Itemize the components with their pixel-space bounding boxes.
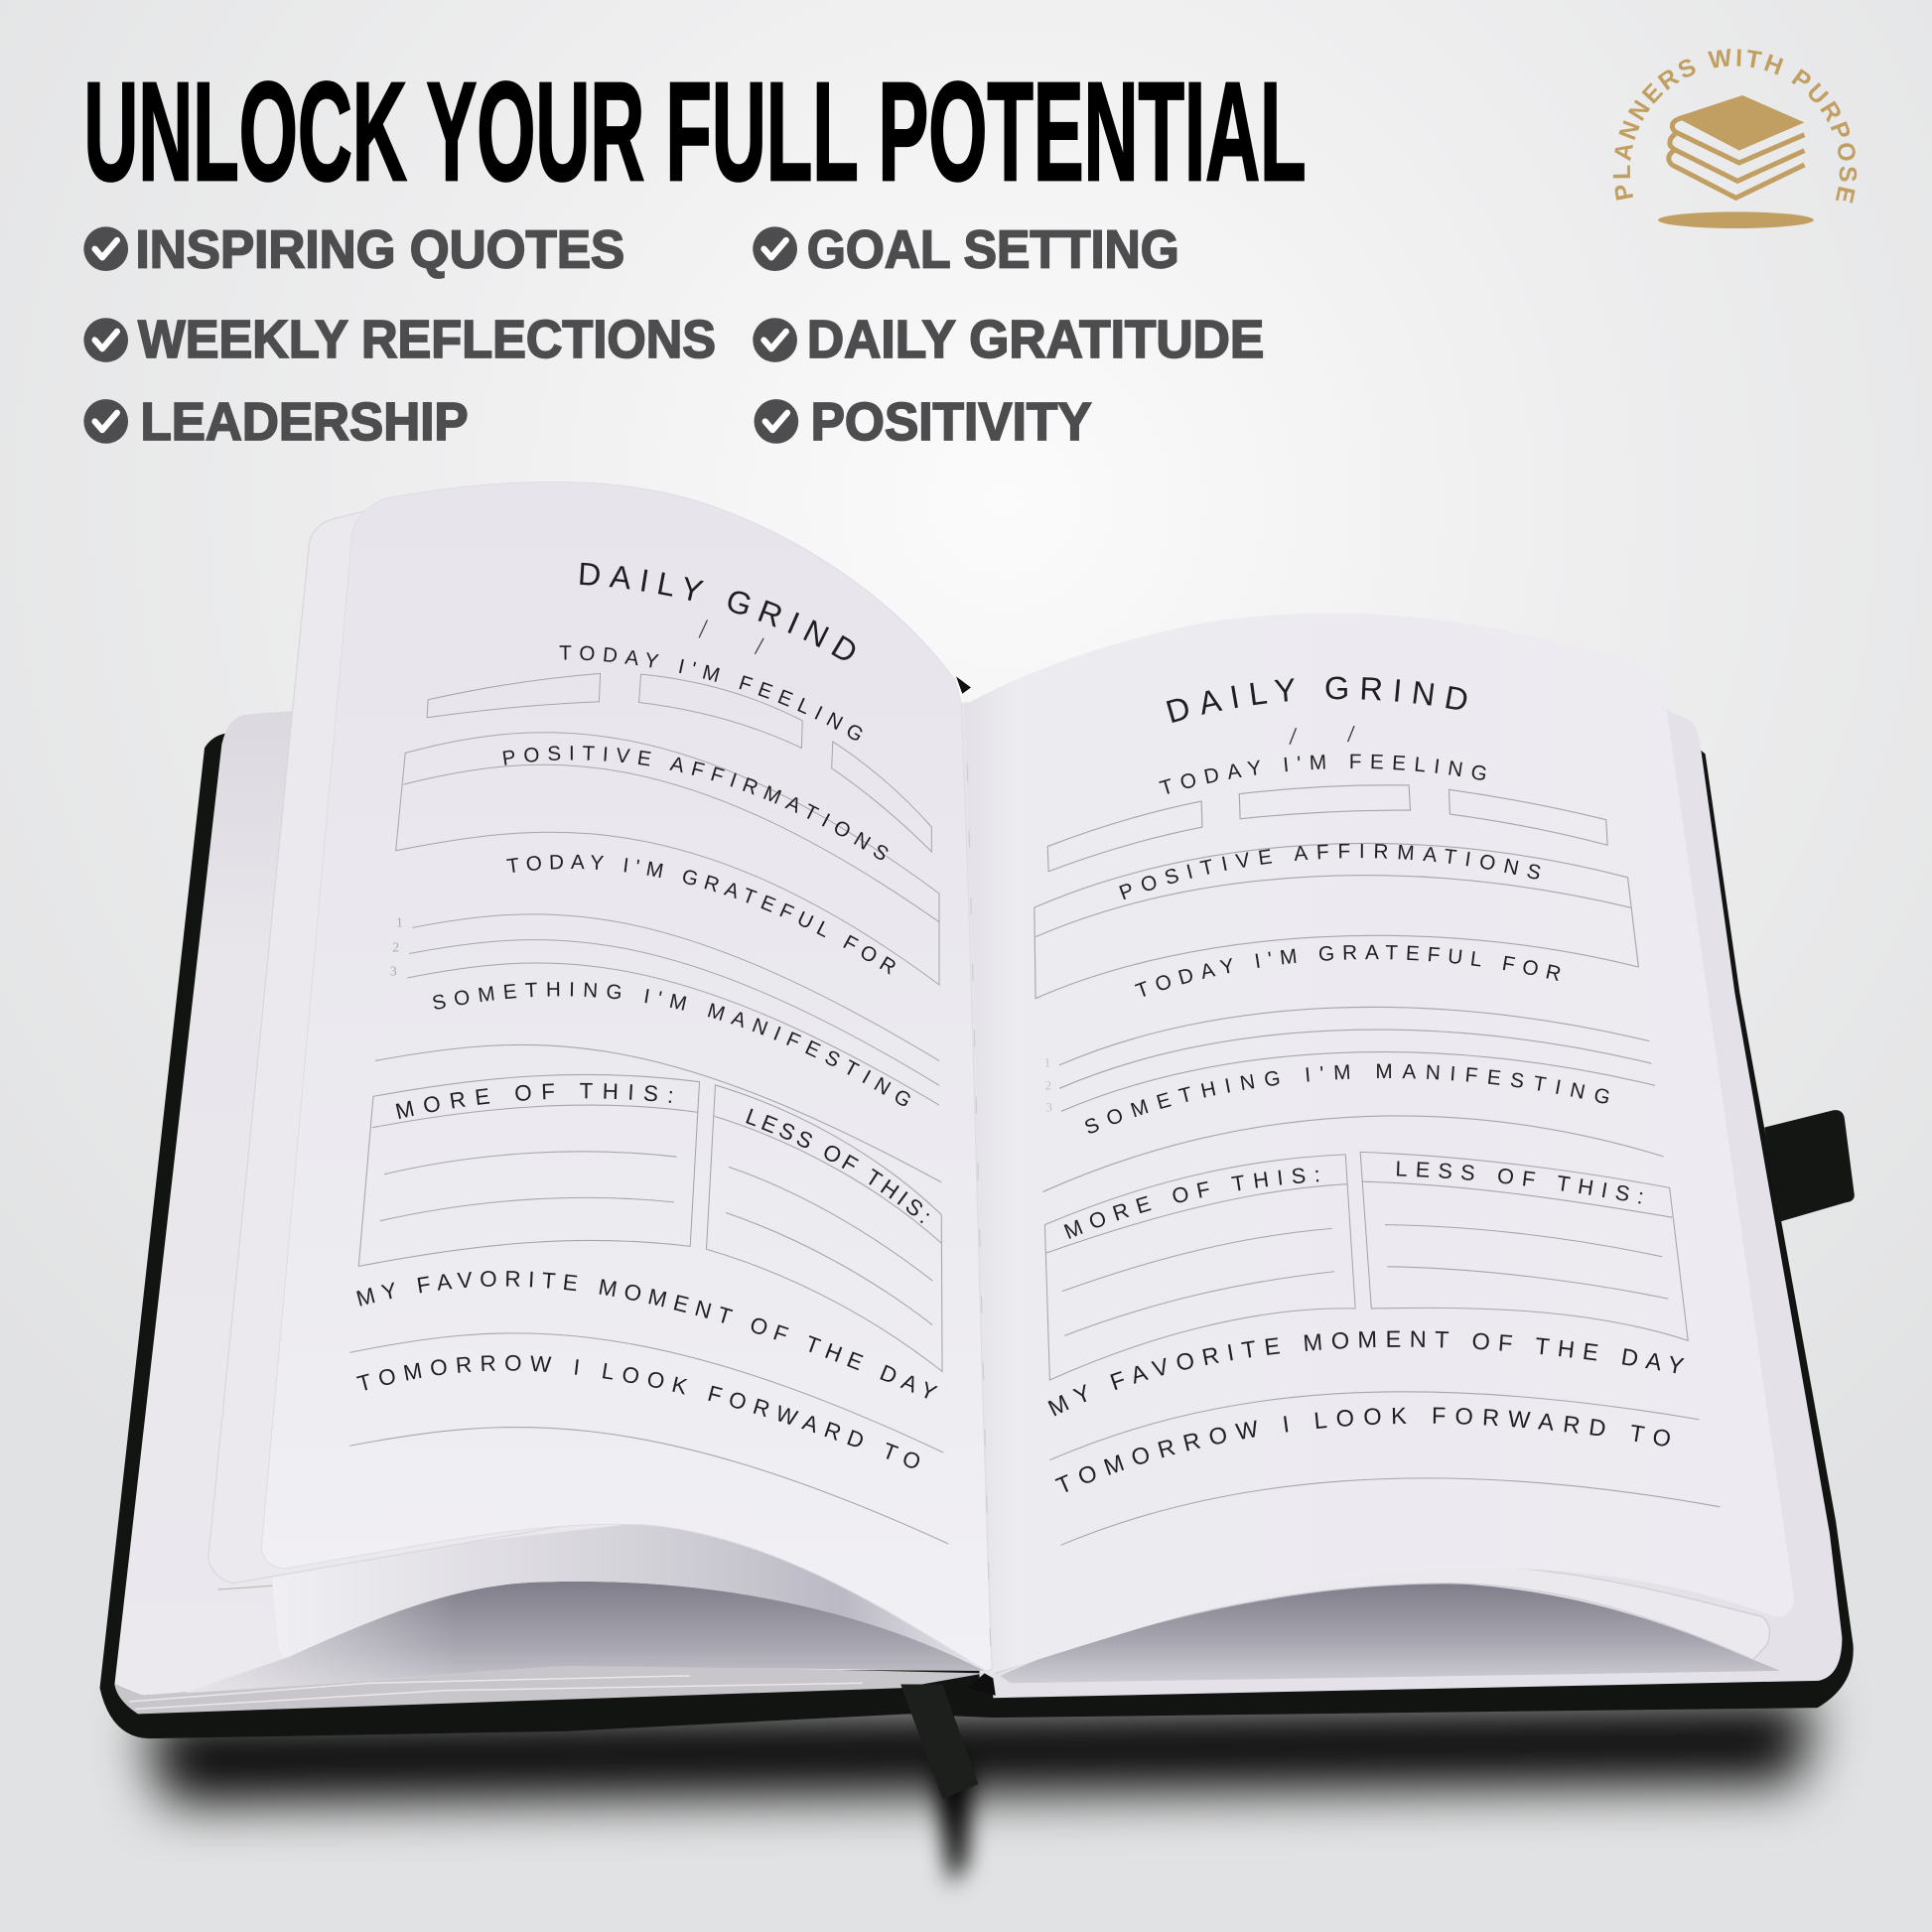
feeling boxes — [427, 673, 931, 852]
label: less of this: LESS OF THIS: — [1397, 1162, 1642, 1203]
icon: stacked books — [1658, 95, 1814, 228]
feature checklist — [83, 220, 1264, 452]
open planner — [99, 482, 1855, 1799]
item: weekly reflections: WEEKLY REFLECTIONS — [138, 311, 716, 369]
gutter fill — [956, 702, 1004, 1678]
label: affirmations: POSITIVE AFFIRMATIONS — [502, 746, 888, 860]
left page form: upper — [390, 562, 939, 1106]
gratitude lines — [1059, 1007, 1655, 1111]
label: feeling: TODAY I'M FEELING — [1159, 755, 1486, 794]
affirmations box — [396, 733, 939, 985]
gratitude numbers: 2 — [392, 940, 399, 955]
label: tomorrow: TOMORROW I LOOK FORWARD TO — [1054, 1408, 1670, 1492]
label: affirmations: POSITIVE AFFIRMATIONS — [1119, 844, 1541, 899]
label: grateful: TODAY I'M GRATEFUL FOR — [1134, 945, 1561, 997]
manifesting line — [1042, 1116, 1664, 1191]
item: leadership: LEADERSHIP — [140, 393, 469, 452]
left page form: lower — [349, 1044, 949, 1545]
gratitude numbers: 1 — [1044, 1055, 1050, 1070]
middle curled leaf — [271, 1523, 985, 1671]
label: manifesting: SOMETHING I'M MANIFESTING — [1085, 1064, 1609, 1134]
favorite moment line — [1049, 1392, 1699, 1460]
item: goal setting: GOAL SETTING — [807, 220, 1179, 279]
right page form: upper — [1034, 677, 1664, 1239]
favorite moment line — [349, 1333, 943, 1452]
heading: daily grind: DAILY GRIND — [1166, 677, 1467, 723]
label: feeling: TODAY I'M FEELING — [560, 645, 862, 741]
item: inspiring quotes: INSPIRING QUOTES — [136, 220, 624, 279]
back left leaf — [208, 510, 567, 1584]
left fade over curl — [185, 1591, 456, 1693]
left page edges — [114, 1663, 985, 1714]
right curled leaves — [996, 1565, 1769, 1673]
label: favorite moment: MY FAVORITE MOMENT OF THE DAY — [1047, 1330, 1684, 1416]
less of this box — [1360, 1152, 1688, 1340]
label: manifesting: SOMETHING I'M MANIFESTING — [433, 982, 910, 1106]
front left page — [261, 482, 992, 1671]
affirmations box — [1035, 843, 1638, 999]
right back pages — [986, 705, 1842, 1698]
item: positivity: POSITIVITY — [811, 393, 1092, 452]
item: daily gratitude: DAILY GRATITUDE — [807, 311, 1264, 369]
black cover — [100, 733, 1854, 1738]
logo: planners with purpose — [1612, 49, 1857, 228]
label: tomorrow: TOMORROW I LOOK FORWARD TO — [356, 1354, 919, 1468]
gratitude numbers: 1 — [396, 914, 403, 929]
ribbon shadow — [932, 1762, 973, 1885]
label: less of this: LESS OF THIS: — [746, 1108, 929, 1223]
date slashes — [1290, 726, 1354, 745]
front right page — [965, 613, 1794, 1673]
more of this box — [1044, 1155, 1355, 1380]
shaded right page curl — [1001, 1584, 1780, 1683]
heading: daily grind: DAILY GRIND — [580, 562, 856, 660]
more of this box — [358, 1074, 700, 1266]
label: more of this: MORE OF THIS: — [395, 1082, 672, 1120]
elastic band — [1764, 1110, 1855, 1222]
gratitude numbers — [390, 914, 403, 979]
gratitude numbers: 3 — [390, 964, 397, 979]
label: favorite moment: MY FAVORITE MOMENT OF THE DAY — [356, 1271, 938, 1399]
gratitude numbers — [1044, 1055, 1052, 1115]
tomorrow line — [1061, 1478, 1721, 1545]
right page form: lower — [1044, 1152, 1720, 1546]
manifesting line — [375, 1044, 941, 1182]
gratitude numbers: 2 — [1045, 1078, 1051, 1093]
gutter stitching — [967, 763, 991, 1651]
left bottom hairline — [218, 1586, 272, 1589]
label: grateful: TODAY I'M GRATEFUL FOR — [506, 854, 896, 975]
logo wordmark: PLANNERS WITH PURPOSE — [1612, 49, 1857, 204]
left back pages — [114, 711, 985, 1696]
spine crease — [956, 676, 996, 1696]
tomorrow line — [349, 1428, 948, 1544]
less of this box — [707, 1085, 942, 1372]
gratitude lines — [407, 914, 939, 1105]
bookmark ribbon — [900, 1685, 978, 1799]
feeling boxes — [1047, 785, 1607, 872]
label: more of this: MORE OF THIS: — [1064, 1168, 1318, 1239]
book shadow — [145, 1701, 1814, 1801]
gratitude numbers: 3 — [1046, 1100, 1052, 1115]
date slashes — [699, 620, 763, 654]
shaded page curl — [185, 1582, 985, 1693]
